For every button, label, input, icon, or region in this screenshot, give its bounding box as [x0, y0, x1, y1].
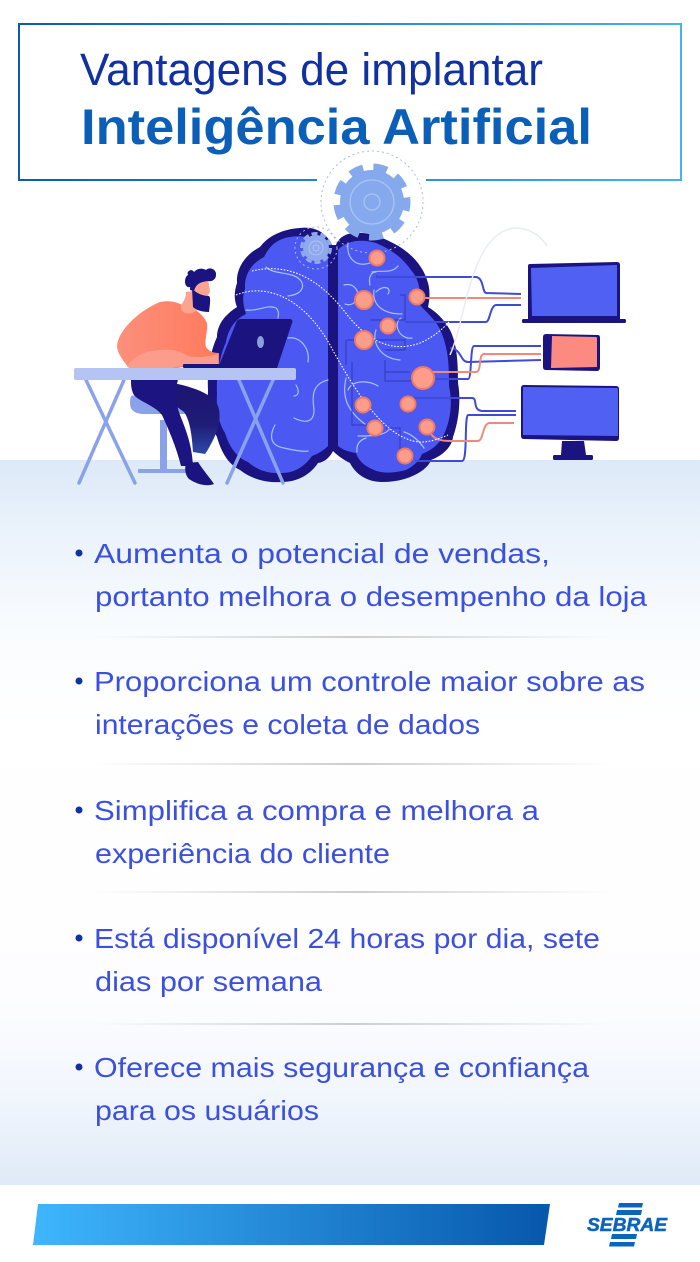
- beard: [192, 288, 210, 312]
- laptop: [218, 319, 292, 368]
- icon: small gear: [295, 227, 337, 269]
- title: [80, 44, 592, 155]
- logo: SEBRAE: [587, 1203, 668, 1246]
- shirt: [117, 301, 219, 369]
- desk: [74, 368, 296, 483]
- list item 3: experiência do cliente: [95, 838, 390, 869]
- list item 3: Simplifica a compra e melhora a: [94, 795, 539, 826]
- list item 5: Oferece mais segurança e confiança: [94, 1052, 589, 1083]
- person: [117, 268, 292, 485]
- tablet device: [543, 334, 600, 371]
- list item 4: dias por semana: [95, 966, 322, 997]
- faint arc: [450, 228, 547, 355]
- list item 5: [76, 1052, 589, 1126]
- list item 5: para os usuários: [95, 1095, 319, 1126]
- list item 1: [76, 538, 647, 612]
- title: Vantagens de implantar: [80, 44, 543, 95]
- arm: [127, 350, 218, 368]
- list item 4: [76, 923, 600, 997]
- laptop device: [522, 262, 626, 323]
- list item 1: portanto melhora o desempenho da loja: [95, 581, 647, 612]
- neck: [181, 290, 200, 313]
- icon: big gear: [321, 151, 423, 253]
- brain folds: [246, 243, 424, 452]
- title: Inteligência Artificial: [81, 99, 592, 155]
- footer bar: [33, 1204, 550, 1245]
- monitor device: [521, 385, 619, 460]
- title frame: [19, 24, 681, 180]
- front leg: [131, 380, 193, 466]
- background panel: [0, 460, 700, 1185]
- back leg: [160, 382, 220, 454]
- face: [193, 278, 210, 300]
- brain nodes: [355, 250, 434, 464]
- stool: [130, 394, 195, 473]
- illustration: brain, person, devices: [74, 151, 626, 485]
- logo: SEBRAE: SEBRAE: [587, 1215, 668, 1235]
- list item 2: [76, 666, 645, 740]
- shoe: [185, 462, 214, 485]
- dotted signal lines: [236, 269, 452, 442]
- list item 3: [76, 795, 539, 869]
- list item 2: Proporciona um controle maior sobre as: [94, 666, 645, 697]
- list item 2: interações e coleta de dados: [95, 709, 480, 740]
- circuit wires: [346, 275, 541, 461]
- hair: [185, 268, 216, 291]
- list item 4: Está disponível 24 horas por dia, sete: [94, 923, 600, 954]
- list item 1: Aumenta o potencial de vendas,: [94, 538, 550, 569]
- icon: brain: [208, 228, 459, 482]
